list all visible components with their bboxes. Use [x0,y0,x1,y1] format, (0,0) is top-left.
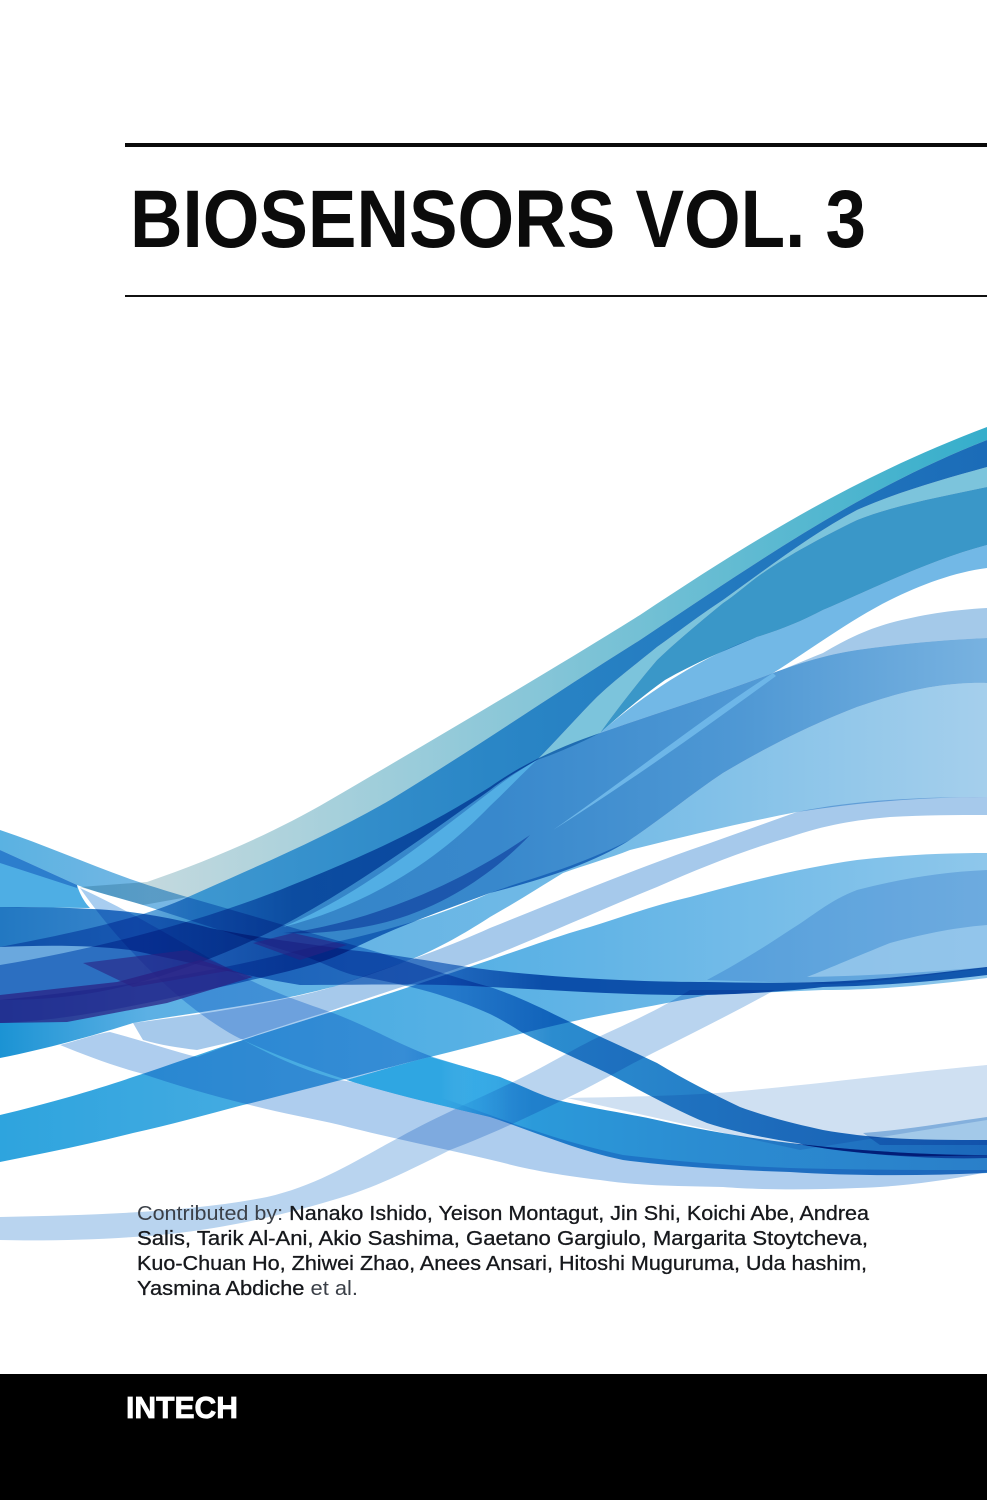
ribbon: pale light large band [0,683,987,1058]
contributors text block [137,1203,870,1300]
ribbon: teal top band [80,427,987,905]
ribbon: purple overlap right [253,933,347,960]
ribbon: purple overlap centre [83,950,233,987]
ribbon: darker overlay on lower band [707,870,987,984]
ribbon: light wedge [600,545,987,733]
ribbon: lighter right patch [807,925,987,977]
ribbon: thin teal strip [537,467,987,760]
contributors line 1: Contributed by: Nanako Ishido, Yeison Montagut, Jin Shi, Koichi Abe, Andrea [137,1203,870,1225]
ribbon: main descending band [0,830,987,1156]
ribbon: deep right shadow [790,1143,987,1158]
ribbon: lower descending band [80,888,987,1175]
ribbon: bright patch left part [347,1057,440,1103]
lower title rule [125,295,987,297]
ribbon: pale lower ascending band [0,990,775,1240]
ribbon: thin dark ribbon [0,907,987,995]
ribbon: dark left tip [0,850,77,888]
ribbon: dark blue band [0,440,987,1000]
top rule [125,143,987,147]
ribbon: purple overlap left [0,960,253,1023]
wave ribbons graphic [0,427,987,1240]
ribbon: dark streak in medium band [283,835,530,933]
contributors line 2: Salis, Tarik Al-Ani, Akio Sashima, Gaetano Gargiulo, Margarita Stoytcheva, [137,1228,868,1250]
ribbon: big lower left band [0,853,987,1162]
ribbon: lightest descending band [60,1032,987,1189]
ribbon: thin highlight stripe [553,673,776,830]
ribbon: palest right band [567,1065,987,1150]
ribbon: bright patch below big band [347,1057,512,1125]
publisher logo: INTECH [126,1390,238,1425]
footer band [0,1374,987,1500]
contributors line 3: Kuo-Chuan Ho, Zhiwei Zhao, Anees Ansari, Hitoshi Muguruma, Uda hashim, [137,1253,867,1275]
ribbon: left light wedge [0,850,90,908]
ribbon: light stripe inside medium band [283,760,537,927]
ribbon: medium blue large band [0,638,987,1023]
ribbon: light band above medium band [773,608,987,673]
ribbon: light right band [863,1117,987,1145]
contributors line 4: Yasmina Abdiche et al. [137,1278,358,1300]
ribbon: teal blue band [600,487,987,733]
title: BIOSENSORS VOL. 3 [130,174,866,265]
ribbon: light thin band under big ribbon [133,797,987,1050]
